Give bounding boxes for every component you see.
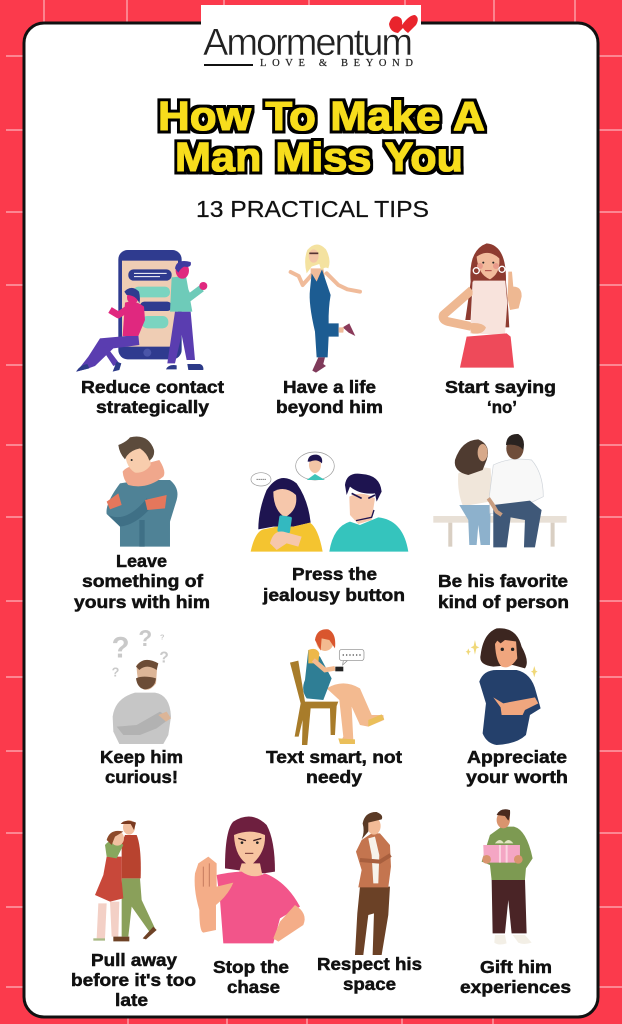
icon: thinking man with question marks: ? xyxy=(112,631,130,664)
label: jealousy button xyxy=(262,585,405,605)
icon: woman with crossed arms xyxy=(355,812,391,955)
panel: tip text smart xyxy=(266,629,402,787)
icon: thinking man with question marks xyxy=(112,625,171,744)
icon: thinking man with question marks: ? xyxy=(159,650,169,667)
label: Keep him xyxy=(100,747,183,767)
label xyxy=(213,957,289,997)
icon: jealous couple with thought bubbles xyxy=(251,452,408,552)
panel: tip life beyond him xyxy=(276,244,383,417)
label: Text smart, not xyxy=(266,747,402,767)
label: your worth xyxy=(466,767,568,787)
label: Press the xyxy=(292,564,377,584)
icon: thinking man with question marks: ? xyxy=(112,666,119,680)
label: needy xyxy=(306,767,362,787)
panel: tip keep curious xyxy=(100,625,183,787)
panel: tip respect space xyxy=(317,812,422,994)
icon: woman raising finger xyxy=(443,243,522,368)
label: beyond him xyxy=(276,397,383,417)
icon: woman with raised hand xyxy=(195,817,305,943)
label: late xyxy=(115,990,148,1010)
label: Start saying xyxy=(445,377,556,397)
label: Stop the xyxy=(213,957,289,977)
label: kind of person xyxy=(438,592,569,612)
logo: LOVE & BEYOND xyxy=(260,58,413,69)
label: Have a life xyxy=(283,377,376,397)
label: strategically xyxy=(96,397,209,417)
label: before it's too xyxy=(71,970,196,990)
label: ‘no’ xyxy=(487,397,517,417)
panel: tip reduce contact xyxy=(76,250,224,417)
title xyxy=(158,93,485,180)
label xyxy=(317,954,422,994)
panel: tip gift experiences xyxy=(460,809,571,997)
label: Leave xyxy=(116,551,167,571)
icon: man holding gift xyxy=(482,809,533,945)
panel: tip jealousy button xyxy=(251,452,408,605)
title: How To Make A xyxy=(158,93,485,139)
label xyxy=(74,551,210,612)
icon: couple with phone xyxy=(76,250,207,372)
icon: couple on bench xyxy=(433,434,567,547)
label: Pull away xyxy=(91,950,177,970)
label xyxy=(266,747,402,787)
label: yours with him xyxy=(74,592,210,612)
label: space xyxy=(343,974,396,994)
label: Be his favorite xyxy=(438,571,568,591)
label xyxy=(438,571,569,612)
label xyxy=(445,377,556,417)
icon: confident woman with sparkles xyxy=(466,628,541,745)
logo xyxy=(201,5,421,70)
panel: tip stop the chase xyxy=(195,817,305,997)
label: Respect his xyxy=(317,954,422,974)
label xyxy=(466,747,568,787)
label xyxy=(262,564,405,605)
label xyxy=(460,957,571,997)
panel: tip pull away xyxy=(71,820,196,1010)
label xyxy=(100,747,183,787)
icon: hugging couple xyxy=(93,820,157,941)
logo: Amormentum xyxy=(203,22,413,64)
label: Appreciate xyxy=(467,747,567,767)
label: curious! xyxy=(105,767,178,787)
label xyxy=(81,377,224,417)
panel: tip leave something xyxy=(74,437,210,612)
icon: woman on chair texting xyxy=(290,629,384,745)
label: Gift him xyxy=(480,957,552,977)
label: something of xyxy=(82,571,203,591)
label: Reduce contact xyxy=(81,377,224,397)
icon: thinking man with question marks: ? xyxy=(160,632,165,641)
label: chase xyxy=(227,977,280,997)
label xyxy=(71,950,196,1010)
subtitle: 13 PRACTICAL TIPS xyxy=(196,196,429,222)
title: Man Miss You xyxy=(175,134,463,180)
label xyxy=(276,377,383,417)
icon: man in coat and scarf xyxy=(106,437,177,547)
panel: tip saying no xyxy=(443,243,556,417)
icon: thinking man with question marks: ? xyxy=(138,625,152,651)
icon: blonde woman dancing xyxy=(291,244,360,373)
label: experiences xyxy=(460,977,571,997)
panel: tip favorite person xyxy=(433,434,569,612)
panel: tip appreciate worth xyxy=(466,628,568,787)
